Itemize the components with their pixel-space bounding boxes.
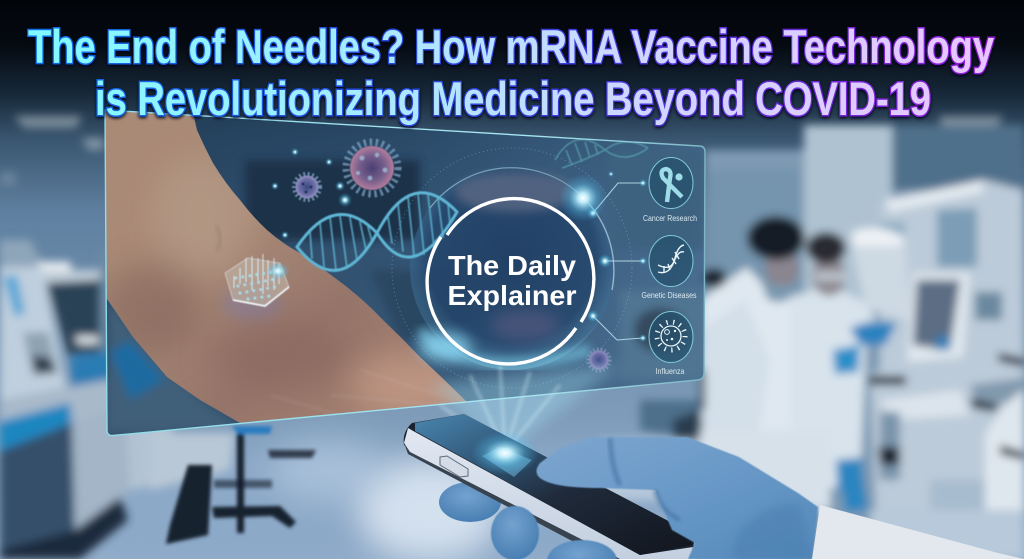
microneedle patch xyxy=(222,254,290,320)
icon: cancer research: Cancer Research xyxy=(643,213,697,223)
lab hood and equipment at right xyxy=(880,180,1024,470)
icon: genetic diseases xyxy=(642,236,696,300)
finger 2 xyxy=(491,506,539,559)
scientist: woman xyxy=(790,285,876,500)
sphere xyxy=(392,148,632,388)
icon: influenza xyxy=(649,312,693,376)
panel border xyxy=(105,110,705,436)
tables and devices xyxy=(870,372,1024,559)
ceiling lights xyxy=(0,116,1004,185)
finger 3 xyxy=(547,540,617,559)
chair xyxy=(166,433,316,544)
scientist: man xyxy=(700,267,832,510)
lab coat sleeve xyxy=(812,505,1024,559)
phone sensor glow xyxy=(482,447,532,477)
title xyxy=(28,20,994,125)
connector nodes xyxy=(559,174,647,342)
forearm xyxy=(106,110,466,423)
left machines xyxy=(0,240,44,268)
floor xyxy=(100,450,700,559)
virus: small lower xyxy=(588,349,610,371)
panel backing xyxy=(105,110,705,436)
gloves xyxy=(833,345,860,374)
gloved finger behind phone xyxy=(439,482,501,522)
blurred background inside panel xyxy=(107,150,704,430)
phone xyxy=(404,414,695,559)
light beam from phone xyxy=(430,365,620,452)
logo: The Daily Explainer xyxy=(427,199,594,364)
gloved hand xyxy=(491,437,818,559)
logo: The Daily Explainer: The Daily xyxy=(448,250,576,281)
connector lines xyxy=(593,183,643,340)
wall right xyxy=(705,150,1024,559)
floating sparks xyxy=(271,148,614,239)
monitor xyxy=(907,273,970,362)
icon: influenza: Influenza xyxy=(656,366,685,376)
virus: large pink xyxy=(346,142,398,194)
logo: The Daily Explainer: Explainer xyxy=(448,280,577,311)
person in white behind the panel xyxy=(150,433,235,490)
icon: genetic diseases: Genetic Diseases xyxy=(642,290,696,300)
phone side button xyxy=(440,456,468,477)
virus: small blue xyxy=(294,174,320,200)
holographic glass panel xyxy=(100,100,705,452)
dna strand: upper xyxy=(555,140,648,168)
icon: cancer research xyxy=(643,158,697,223)
dna strand: large xyxy=(297,193,457,270)
